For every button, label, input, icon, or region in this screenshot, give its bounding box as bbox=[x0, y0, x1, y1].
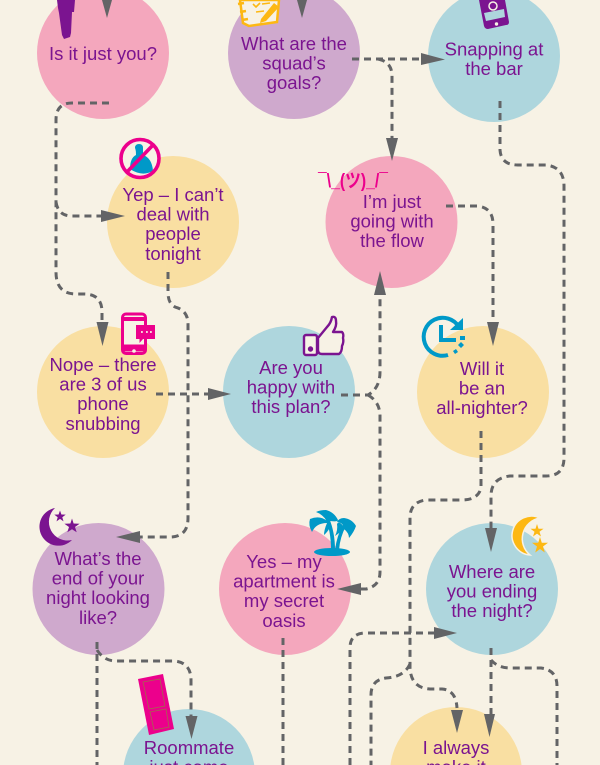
text: is it just you: Is it just you? bbox=[49, 43, 157, 64]
icon: no people bbox=[121, 139, 159, 178]
text: snapping at the bar: the bar bbox=[465, 58, 523, 79]
arrow: is it just you to yep bbox=[56, 202, 125, 222]
text: are you happy: happy with bbox=[247, 377, 335, 398]
panel: where are you ending the night bbox=[426, 516, 558, 655]
panel: is it just you bbox=[37, 0, 169, 119]
icon: thumbs up bbox=[304, 317, 343, 355]
text: snapping at the bar: Snapping at bbox=[445, 38, 543, 60]
text: going with the flow: going with bbox=[350, 211, 434, 232]
arrow: entering is it just you bbox=[102, 0, 112, 18]
arrow: flow to all-nighter bbox=[446, 206, 499, 346]
text: squad goals: What are the bbox=[241, 33, 347, 54]
text: i always: I always bbox=[423, 737, 489, 758]
icon: purple moon and stars bbox=[39, 508, 80, 546]
text: ending the night: Where are bbox=[449, 561, 535, 582]
text: roommate: Roommate bbox=[144, 737, 234, 758]
arrow: end of night straight down bbox=[96, 642, 98, 765]
panel: yep can't deal with people bbox=[107, 139, 239, 288]
icon: phone with camera bbox=[479, 0, 509, 29]
text: going with the flow: the flow bbox=[360, 230, 425, 251]
text: are you happy: this plan? bbox=[251, 396, 331, 417]
icon: gold moon and stars bbox=[512, 516, 548, 555]
panel: will it be an all-nighter bbox=[417, 318, 549, 458]
text: end of your night: What’s the bbox=[54, 548, 142, 569]
text: secret oasis: my secret bbox=[244, 590, 324, 611]
arrow: are you happy to secret oasis bbox=[337, 395, 380, 595]
arrow: entering squad goals bbox=[297, 0, 307, 18]
arrow: are you happy to going with the flow bbox=[341, 271, 386, 395]
text: end of your night: night looking bbox=[46, 587, 150, 608]
text: nope: are 3 of us bbox=[59, 374, 147, 395]
icon: palm trees island bbox=[309, 510, 356, 556]
arrow: snapping to where are you ending bbox=[485, 101, 564, 552]
arrow: all-nighter branch going down bbox=[371, 664, 410, 765]
panel: snapping at the bar bbox=[428, 0, 560, 122]
arrow: where are you ending to i always bbox=[484, 648, 495, 737]
panel: squad goals bbox=[228, 0, 360, 119]
icon: phone with chat bubble bbox=[122, 314, 155, 354]
text: squad goals: squad’s bbox=[262, 53, 326, 74]
panel: going with the flow bbox=[317, 156, 458, 288]
text: nope: phone bbox=[77, 393, 129, 414]
arrow: nope to are you happy bbox=[156, 388, 231, 400]
text: nope: snubbing bbox=[65, 413, 141, 434]
arrow: is it just you to nope bbox=[56, 103, 109, 346]
text: secret oasis: oasis bbox=[262, 610, 306, 631]
panel: are you happy bbox=[223, 317, 355, 458]
arrow: squad goals to snapping bbox=[352, 53, 445, 65]
panel: nope phone snubbing bbox=[37, 314, 169, 458]
text: all-nighter: Will it bbox=[460, 358, 504, 379]
text: yep: people bbox=[145, 223, 201, 244]
icon: door bbox=[138, 674, 174, 735]
text: ending the night: you ending bbox=[447, 581, 537, 602]
text: end of your night: like? bbox=[79, 607, 117, 628]
panel: i always make it bbox=[390, 707, 522, 765]
icon: clock bbox=[424, 318, 465, 356]
text: ending the night: the night? bbox=[451, 600, 533, 621]
text: all-nighter: all-nighter? bbox=[436, 397, 528, 418]
text: end of your night: end of your bbox=[52, 568, 144, 589]
text: are you happy: Are you bbox=[259, 357, 323, 378]
text: all-nighter: be an bbox=[459, 378, 505, 399]
arrow: end of night to roommate bbox=[97, 650, 198, 739]
text: yep: tonight bbox=[145, 243, 201, 264]
panel: end of your night bbox=[32, 508, 164, 655]
panel: roommate just came bbox=[123, 674, 255, 765]
text: secret oasis: apartment is bbox=[233, 571, 335, 592]
arrow: squad goals to flow bbox=[378, 59, 398, 161]
text: secret oasis: Yes – my bbox=[246, 551, 322, 572]
arrow: all-nighter branch to i always bbox=[410, 431, 481, 733]
text: yep: deal with bbox=[136, 204, 210, 225]
arrow: where are you ending branch down bbox=[491, 660, 557, 765]
arrow: secret oasis straight down bbox=[282, 638, 284, 765]
text: squad goals: goals? bbox=[267, 72, 321, 93]
text: going with the flow: I’m just bbox=[363, 191, 421, 212]
text: yep: Yep – I can’t bbox=[122, 184, 224, 205]
text: nope: Nope – there bbox=[50, 354, 156, 375]
icon: notepad and pencil bbox=[238, 0, 279, 26]
panel: secret oasis bbox=[219, 510, 356, 655]
arrow: yep to end of night bbox=[116, 272, 188, 543]
icon: standing person bbox=[57, 0, 75, 39]
icon: shrug emoticon: ¯\_(ツ)_/¯ bbox=[317, 171, 388, 192]
arrow: up into where are you ending bbox=[350, 627, 457, 765]
